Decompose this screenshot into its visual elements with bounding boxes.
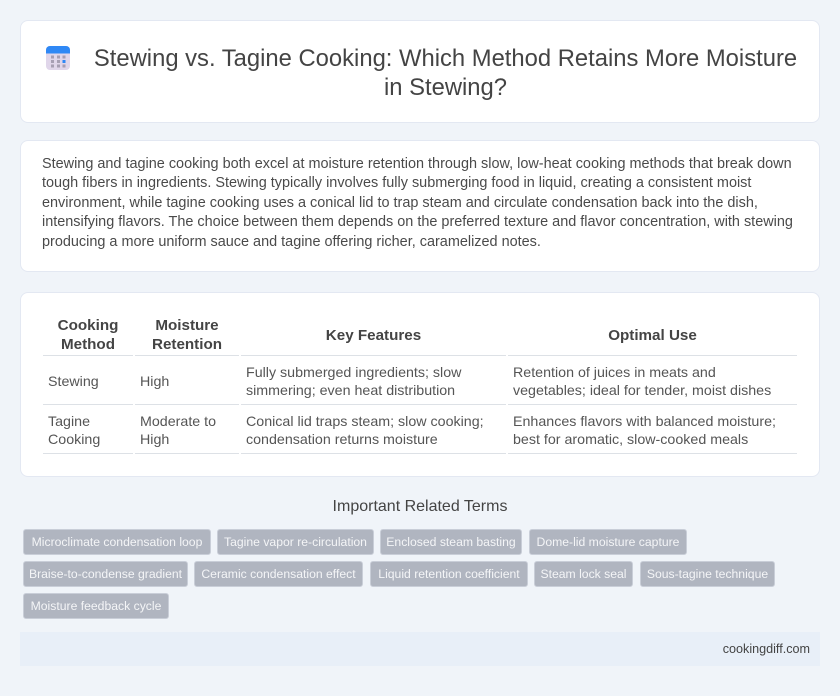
related term tags: Steam lock seal [540, 567, 627, 581]
table row: tagine: Cooking [48, 432, 100, 448]
summary text: environment, while tagine cooking uses a conical lid to trap steam and circulate condensation back into the dish, [42, 195, 758, 211]
panel: comparison table [20, 292, 820, 477]
icon: calendar [46, 46, 70, 70]
heading: related terms: Important Related Terms [333, 498, 507, 515]
related term tags: Sous-tagine technique [647, 567, 768, 581]
table row: stewing: Fully submerged ingredients; slow [246, 365, 461, 381]
table header: Retention [152, 336, 222, 353]
related term tags: Braise-to-condense gradient [29, 567, 182, 581]
table header: Cooking [58, 317, 118, 334]
related term tags: Enclosed steam basting [386, 535, 516, 549]
table header [58, 317, 697, 353]
summary text: Stewing and tagine cooking both excel at moisture retention through slow, low-heat cooking methods that break down [42, 156, 792, 172]
table row: tagine: condensation returns moisture [246, 432, 438, 448]
table row: stewing: Retention of juices in meats and [513, 365, 716, 381]
table content [43, 317, 797, 454]
related term tags: Liquid retention coefficient [378, 567, 520, 581]
title: in Stewing? [384, 74, 507, 101]
table row: stewing: simmering; even heat distribution [246, 383, 455, 399]
table row: tagine: Conical lid traps steam; slow cooking; [246, 414, 484, 430]
related term tags: Microclimate condensation loop [32, 535, 202, 549]
related term tags: Moisture feedback cycle [31, 599, 161, 613]
summary text [42, 156, 793, 250]
table row: tagine [48, 414, 776, 448]
related term tags: Ceramic condensation effect [201, 567, 356, 581]
summary text: producing a more uniform sauce and tagine offering richer, caramelized notes. [42, 234, 541, 250]
footer bar [20, 632, 820, 666]
table row: stewing: High [140, 374, 169, 390]
related term tags [23, 529, 775, 619]
table row: tagine: best for aromatic, slow-cooked meals [513, 432, 748, 448]
related term tags: Tagine vapor re-circulation [224, 535, 367, 549]
table header: Key Features [326, 327, 421, 344]
title: Stewing vs. Tagine Cooking: Which Method Retains More Moisture [94, 45, 797, 72]
table row: stewing: vegetables; ideal for tender, moist dishes [513, 383, 771, 399]
panel: title card [20, 20, 820, 123]
panel: summary [20, 140, 820, 272]
related term tags: Dome-lid moisture capture [537, 535, 679, 549]
summary text: tough fibers in ingredients. Stewing typically involves fully submerging food in liquid, creating a consistent moist [42, 175, 751, 191]
table row: tagine: Tagine [48, 414, 90, 430]
title [94, 45, 797, 101]
table row: tagine: High [140, 432, 169, 448]
table row: tagine: Enhances flavors with balanced moisture; [513, 414, 776, 430]
table row: stewing [48, 365, 771, 399]
table header: Method [61, 336, 115, 353]
table row: stewing: Stewing [48, 374, 99, 390]
table header: Optimal Use [608, 327, 697, 344]
summary text: intensifying flavors. The choice between them depends on the preferred texture and flavor concentration, with stewing [42, 214, 793, 230]
footer source: cookingdiff.com [723, 642, 810, 656]
table row: tagine: Moderate to [140, 414, 216, 430]
table header: Moisture [155, 317, 219, 334]
